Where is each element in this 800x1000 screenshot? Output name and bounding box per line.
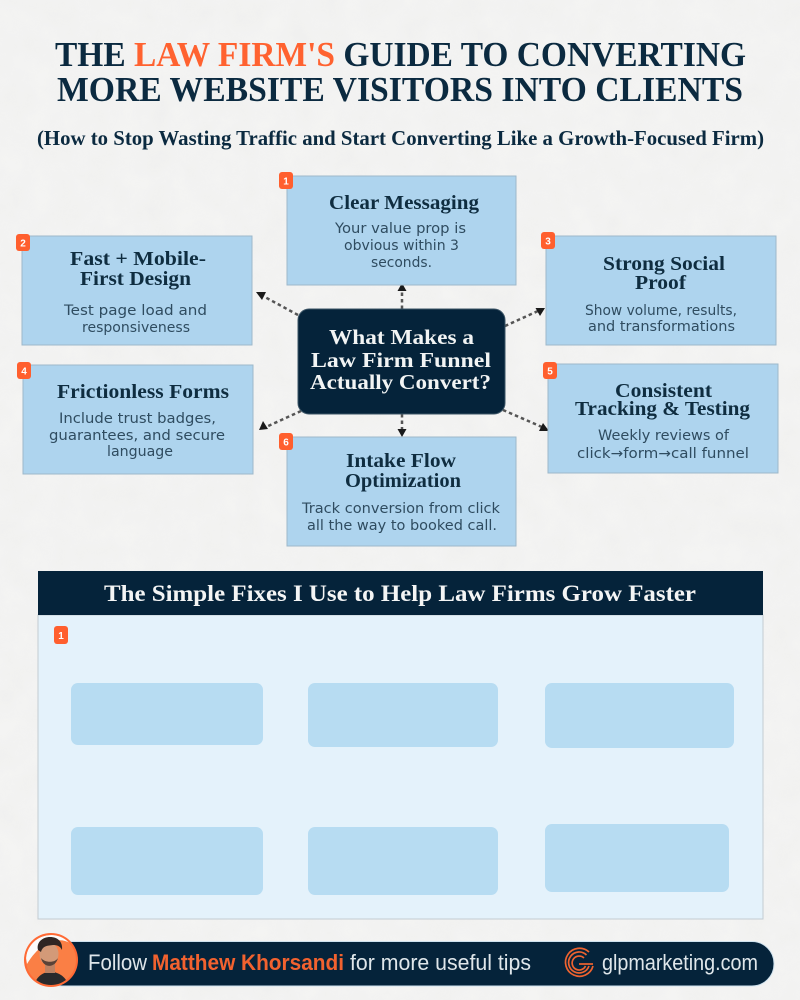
panel: card 1 clear messaging: 1	[283, 176, 289, 188]
panel: card 2 fast mobile-first design: responsiveness	[82, 320, 190, 336]
panel: card 1 clear messaging: Clear Messaging	[329, 192, 479, 214]
panel: card 3 strong social proof: Proof	[635, 272, 686, 294]
panel: card 2 fast mobile-first design	[16, 234, 252, 345]
icon: author avatar	[24, 933, 78, 987]
panel: card 6 intake flow optimization: Intake Flow	[346, 450, 457, 472]
empty tile: row 2 middle	[308, 827, 498, 895]
panel: card 1 clear messaging	[279, 172, 516, 285]
subtitle: (How to Stop Wasting Traffic and Start Converting Like a Growth-Focused Firm)	[37, 126, 764, 150]
panel: card 4 frictionless forms: 4	[21, 366, 27, 378]
panel: card 3 strong social proof: Show volume, results,	[585, 303, 737, 319]
panel: card 4 frictionless forms	[17, 362, 253, 474]
panel: card 5 consistent tracking and testing: Consistent	[615, 380, 712, 402]
title: MORE WEBSITE VISITORS INTO CLIENTS	[57, 70, 743, 109]
panel: card 3 strong social proof: 3	[545, 236, 551, 248]
footer website text: glpmarketing.com	[602, 950, 758, 975]
panel: card 3 strong social proof: Strong Social	[603, 253, 725, 275]
footer follow text	[88, 950, 531, 975]
panel: card 1 clear messaging: Your value prop is	[334, 221, 466, 237]
empty tile: row 1 middle	[308, 683, 498, 747]
panel: card 6 intake flow optimization: 6	[283, 438, 289, 448]
arrow: to card 4	[259, 411, 301, 430]
footer follow text: for more useful tips	[350, 950, 531, 975]
panel: card 5 consistent tracking and testing: 5	[547, 366, 553, 378]
arrow: to card 1	[398, 283, 406, 309]
panel: card 5 consistent tracking and testing	[543, 362, 778, 473]
arrow: to card 5	[503, 410, 549, 431]
footer follow text: Follow	[88, 950, 147, 975]
panel: card 2 fast mobile-first design: Test page load and	[63, 303, 207, 319]
arrow: to card 2	[256, 292, 298, 315]
panel: card 3 strong social proof	[541, 232, 776, 345]
footer follow text: Matthew Khorsandi	[152, 950, 344, 975]
panel: card 3 strong social proof: and transformations	[588, 319, 735, 335]
panel: card 5 consistent tracking and testing: click→form→call funnel	[577, 446, 749, 462]
central question box: Law Firm Funnel	[311, 348, 491, 372]
section header bar	[38, 571, 763, 615]
panel: card 6 intake flow optimization: Optimization	[345, 470, 461, 492]
arrow: to card 6	[398, 414, 406, 437]
empty tile: row 1 right	[545, 683, 734, 748]
arrow: to card 3	[505, 308, 545, 326]
empty tile: row 1 left	[71, 683, 263, 745]
badge 1: 1	[58, 631, 64, 642]
panel: card 2 fast mobile-first design: Fast + Mobile-	[70, 248, 206, 270]
empty tile: row 2 left	[71, 827, 263, 895]
panel: card 4 frictionless forms: language	[107, 444, 173, 460]
panel: card 1 clear messaging: seconds.	[371, 255, 432, 271]
title	[55, 35, 746, 109]
section header bar: The Simple Fixes I Use to Help Law Firms Grow Faster	[104, 581, 696, 606]
central question box	[298, 309, 505, 414]
panel: card 1 clear messaging: obvious within 3	[344, 238, 459, 254]
footer pill	[40, 942, 774, 986]
panel: card 6 intake flow optimization: all the way to booked call.	[307, 518, 497, 534]
empty tile: row 2 right	[545, 824, 729, 892]
icon: glp logo	[566, 948, 593, 976]
panel: card 4 frictionless forms: Include trust badges,	[59, 411, 216, 427]
panel: simple fixes	[38, 571, 763, 919]
title: THE LAW FIRM'S GUIDE TO CONVERTING	[55, 35, 746, 74]
panel: card 4 frictionless forms: guarantees, and secure	[49, 428, 225, 444]
panel: card 6 intake flow optimization	[279, 433, 516, 546]
central question box: What Makes a	[329, 325, 475, 349]
central question box: Actually Convert?	[310, 370, 491, 394]
panel: card 2 fast mobile-first design: 2	[20, 238, 26, 250]
panel: card 5 consistent tracking and testing: Weekly reviews of	[598, 428, 730, 444]
panel: card 4 frictionless forms: Frictionless Forms	[57, 381, 229, 403]
footer banner	[24, 933, 774, 987]
panel: card 6 intake flow optimization: Track conversion from click	[301, 501, 501, 517]
panel: card 2 fast mobile-first design: First Design	[80, 268, 191, 290]
badge 1	[54, 626, 68, 644]
panel: card 5 consistent tracking and testing: Tracking & Testing	[575, 398, 750, 420]
panel background	[38, 615, 763, 919]
